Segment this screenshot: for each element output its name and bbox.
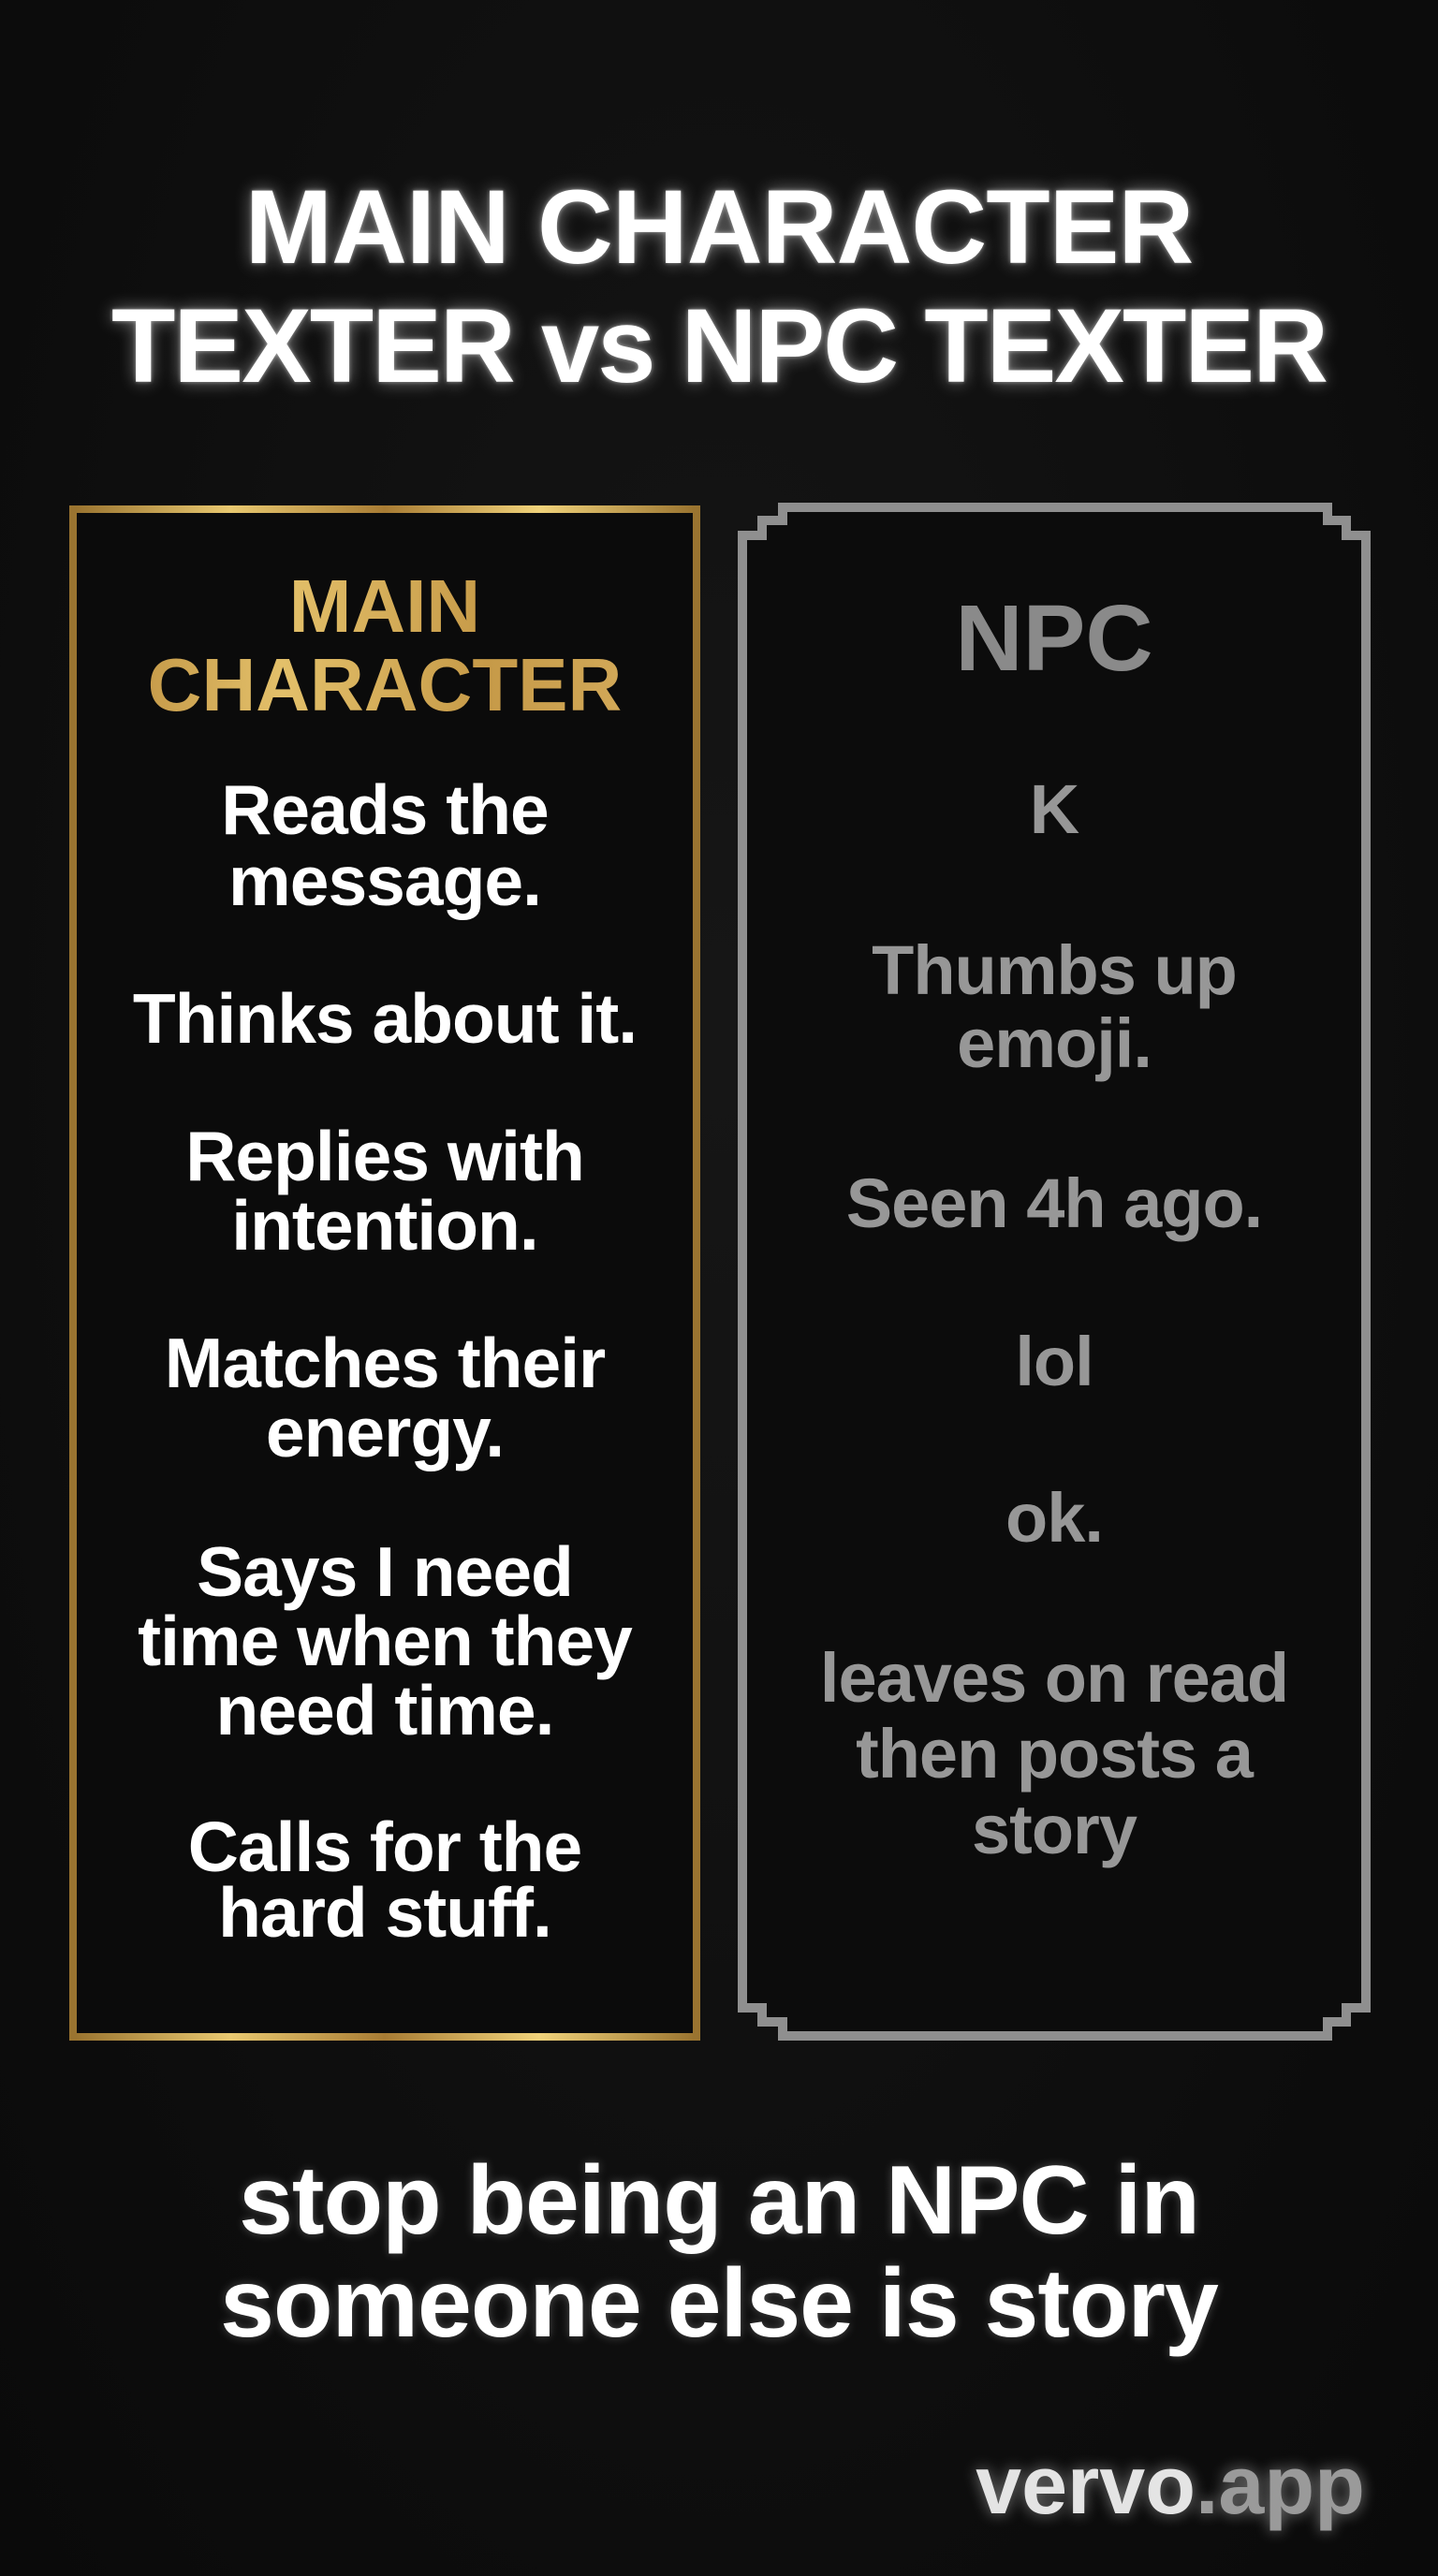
item: says [138,1532,633,1749]
tagline [220,2146,1221,2361]
item: thinks: Thinks about it. [133,979,637,1058]
item: thumbs up: Thumbs up [872,931,1237,1009]
item: leaves: story [972,1791,1137,1868]
item: leaves: then posts a [856,1715,1253,1793]
item: matches: energy. [266,1393,504,1471]
item: leaves: leaves on read [820,1639,1288,1717]
heading: main character [77,567,693,724]
item: ok: ok. [1005,1479,1103,1557]
tagline: someone else is story [220,2249,1218,2358]
item: says: Says I need [197,1532,573,1611]
title: MAIN CHARACTER [245,168,1193,285]
item: reads [221,770,549,920]
item: leaves [820,1639,1288,1868]
item: replies [185,1117,584,1265]
title: TEXTER vs NPC TEXTER [111,287,1327,404]
item: thumbs up [872,931,1237,1082]
heading: npc: NPC [955,586,1153,691]
item: says: need time. [216,1671,553,1749]
item: calls: hard stuff. [218,1873,551,1952]
item: replies: intention. [231,1186,538,1265]
item: seen: Seen 4h ago. [846,1164,1262,1242]
item: matches: Matches their [165,1324,605,1402]
title [105,168,1333,404]
item: calls [188,1808,581,1952]
brand: vervo.app: vervo.app [976,2438,1365,2531]
item: K: K [1030,770,1078,848]
tagline: stop being an NPC in [239,2146,1199,2255]
item: replies: Replies with [185,1117,584,1195]
panel: npc [738,503,1371,2041]
panel: main character [69,505,700,2041]
item: lol: lol [1015,1323,1093,1400]
item: thumbs up: emoji. [957,1004,1152,1082]
heading: main character: MAIN [289,564,480,648]
heading: main character: CHARACTER [148,643,622,726]
item: matches [165,1324,605,1471]
item: reads: Reads the [221,770,549,849]
item: calls: Calls for the [188,1808,581,1886]
item: reads: message. [228,842,541,920]
item: says: time when they [138,1602,632,1680]
